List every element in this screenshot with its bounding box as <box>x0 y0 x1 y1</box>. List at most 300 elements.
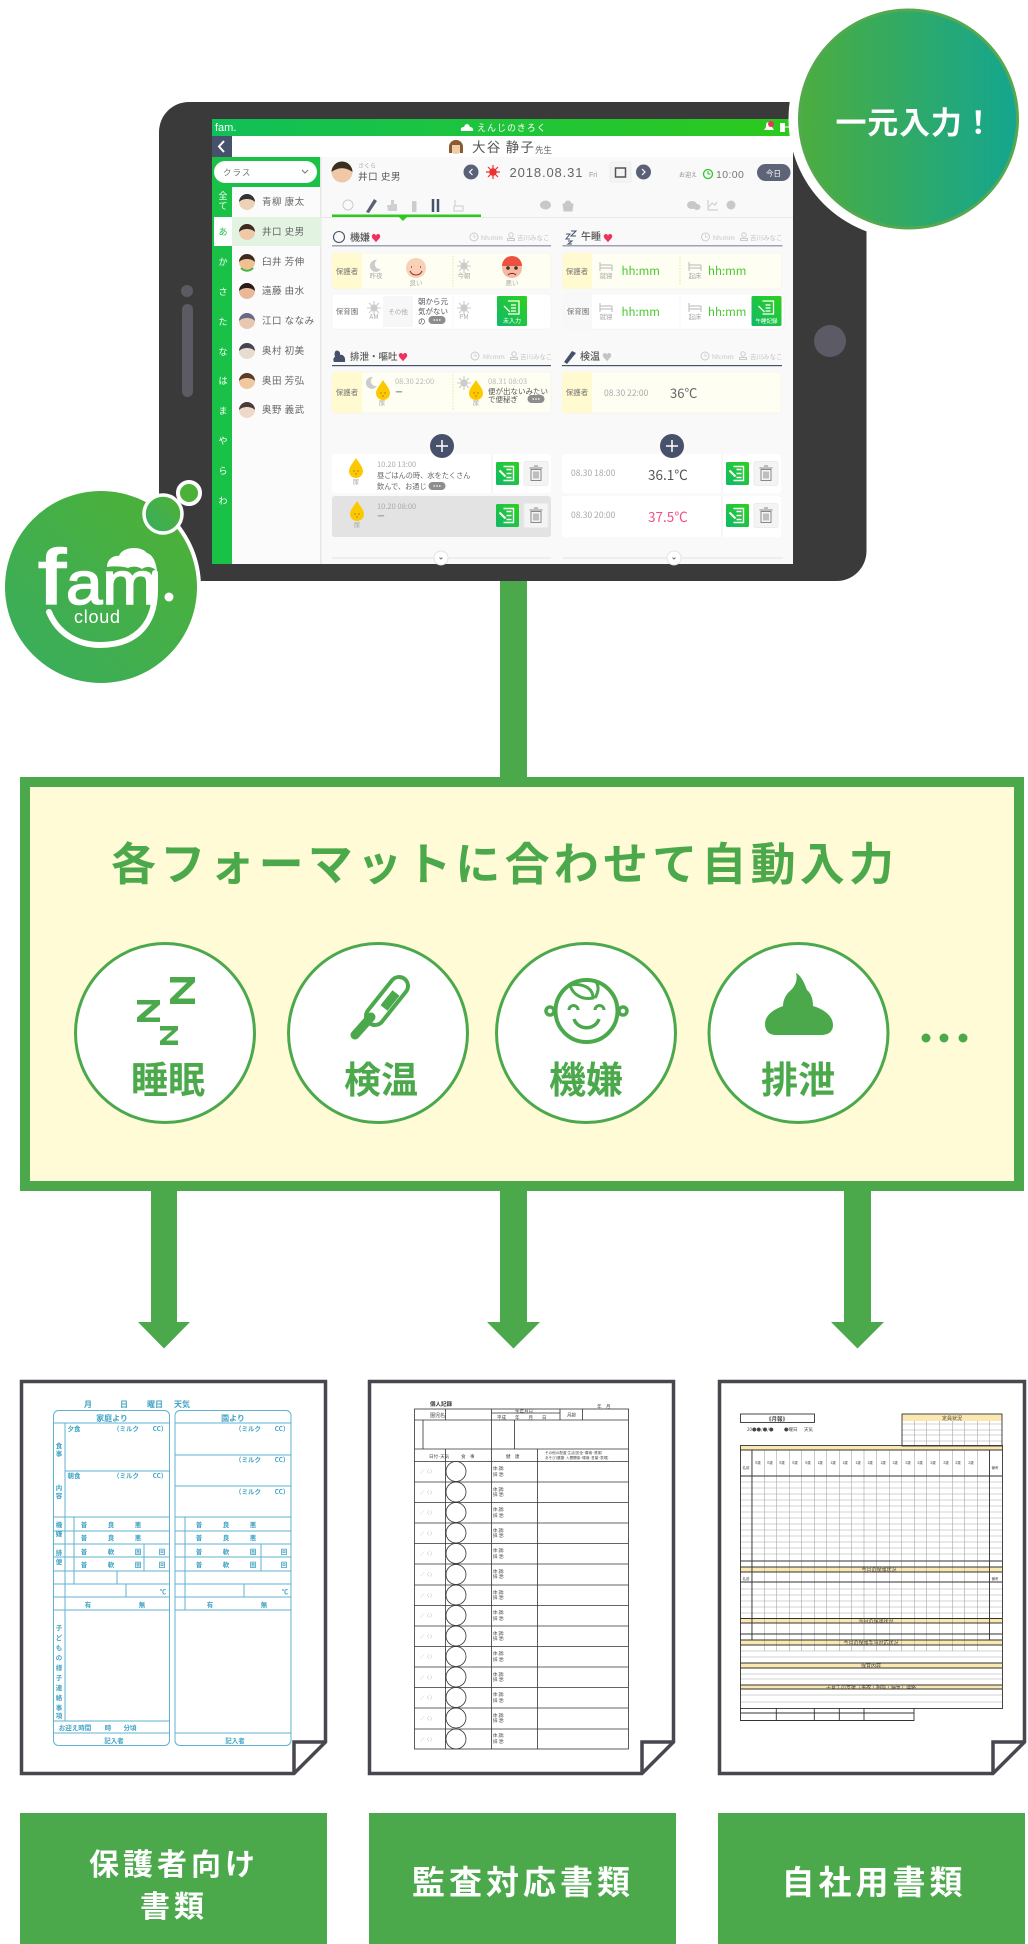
nap card: parent: 保護者 <box>566 266 589 277</box>
record text: 体 調: <box>493 1547 504 1554</box>
callout: unified input bubble <box>788 0 1028 239</box>
record text: 体 調: <box>493 1589 504 1596</box>
toilet card: parent: で便秘ぎ <box>488 394 518 405</box>
temperature card: parent <box>562 372 781 413</box>
child list: 遠藤 由水 <box>262 283 305 297</box>
section: temperature: ♥ <box>602 349 612 364</box>
form text: 普 <box>196 1559 203 1569</box>
form text: 時 <box>105 1722 112 1732</box>
kana index: は <box>218 374 228 387</box>
record text: 排 泄: <box>493 1512 504 1519</box>
arrow: to parent documents <box>138 1191 190 1348</box>
kana index: か <box>218 255 228 268</box>
mood card: nursery: PM <box>459 311 469 321</box>
teacher name bar: 先生 <box>535 144 553 156</box>
toilet row 1 <box>332 454 551 493</box>
toilet row 2: 10.20 08:00 <box>377 501 416 512</box>
logo cloud <box>107 548 157 571</box>
form text: 軟 <box>223 1546 230 1556</box>
callout: unified input bubble: 一元入力！ <box>836 98 994 143</box>
temperature list <box>562 454 781 537</box>
item: toilet <box>709 944 888 1122</box>
form text: ℃ <box>282 1586 289 1596</box>
section: mood: 吉川みなこ <box>517 232 550 242</box>
item: temperature: 検温 <box>344 1050 418 1104</box>
report text: 1歳 <box>817 1460 823 1466</box>
record text: 健 康 <box>506 1453 520 1460</box>
form text: 軟 <box>108 1559 115 1569</box>
mood card: parent <box>332 253 551 289</box>
section: temperature: 吉川みなこ <box>750 351 782 361</box>
toilet card: parent: 便が出ないみたい <box>488 386 548 397</box>
record text: ／（ ） <box>420 1737 435 1743</box>
report text: 2歳 <box>905 1460 911 1466</box>
app header bar: えんじのきろく <box>477 121 547 134</box>
form text: 分頃 <box>124 1722 137 1732</box>
section: mood: 機嫌 <box>350 229 370 244</box>
class selector: クラス <box>223 166 251 178</box>
mood card: parent: 今朝 <box>458 270 470 280</box>
report text: 1歳 <box>855 1460 861 1466</box>
nap card: nursery: hh:mm <box>708 304 746 320</box>
form text: 良 <box>108 1519 115 1529</box>
form text: 嫌 <box>56 1528 63 1538</box>
form text: 固 <box>250 1559 257 1569</box>
child list: 奥田 芳弘 <box>262 373 305 387</box>
category tabs <box>321 199 793 221</box>
child and date header: 2018.08.31 <box>510 165 584 180</box>
mood card: parent: 良い <box>410 277 422 287</box>
report yellow bands <box>740 1414 1002 1689</box>
form text: 月 <box>84 1399 92 1410</box>
logo smile <box>49 573 155 645</box>
form text: ど <box>56 1632 63 1642</box>
form text: 園より <box>221 1413 245 1424</box>
form text: 天気 <box>174 1399 190 1410</box>
report text: 1歳 <box>880 1460 886 1466</box>
app screen <box>212 119 793 565</box>
temperature row 2: 37.5℃ <box>648 506 688 526</box>
form text: CC） <box>275 1423 289 1433</box>
document: monthly report <box>720 1382 1024 1774</box>
kana index: わ <box>218 494 228 507</box>
record text: ／（ ） <box>420 1551 435 1557</box>
report text: 2歳 <box>930 1460 936 1466</box>
record text: 排 泄: <box>493 1615 504 1622</box>
section: toilet: 吉川みなこ <box>520 351 552 361</box>
report text: 1歳 <box>830 1460 836 1466</box>
form text: 子 <box>56 1622 63 1632</box>
kana index: や <box>218 434 228 447</box>
record text: ／（ ） <box>420 1695 435 1701</box>
section: nap: ♥ <box>603 230 613 245</box>
record text: 個人記録 <box>430 1400 453 1408</box>
child and date header: Fri <box>589 172 598 179</box>
form text: 回 <box>281 1546 288 1556</box>
record text: あそび(健康･人間関係･環境･言葉･表現) <box>545 1455 609 1461</box>
report text: 備考 <box>992 1576 999 1582</box>
report text: 0歳 <box>767 1460 773 1466</box>
section: toilet: hh:mm <box>483 351 505 361</box>
kana index: 全 <box>218 189 228 202</box>
panel heading: 各フォーマットに合わせて自動入力 <box>111 828 898 893</box>
record text: 体 調: <box>493 1712 504 1719</box>
tablet home button <box>814 325 846 357</box>
toilet row 1: 昼ごはんの時、水をたくさん <box>377 471 470 481</box>
report text: 今月の保護手当対応状況 <box>843 1640 899 1646</box>
section: temperature: hh:mm <box>712 351 734 361</box>
kana index: な <box>218 345 228 358</box>
section: mood <box>332 229 551 329</box>
mood card: parent: 悪い <box>506 277 518 287</box>
form text: （ミルク <box>235 1454 261 1464</box>
form text: 食 <box>56 1440 63 1450</box>
record text: 排 泄: <box>493 1491 504 1498</box>
kana index: ら <box>218 464 228 477</box>
record text: 日付･天気 <box>429 1453 450 1460</box>
record text: 排 泄: <box>493 1635 504 1642</box>
class selector <box>214 161 317 183</box>
report text: 0歳 <box>779 1460 785 1466</box>
form text: CC） <box>275 1486 289 1496</box>
tablet <box>159 102 866 581</box>
report text: 子育ての支援（事故・相談・病気）連絡 <box>826 1684 916 1691</box>
form text: 様 <box>56 1662 63 1672</box>
section: toilet <box>332 349 552 413</box>
record text: 排 泄: <box>493 1573 504 1580</box>
report text: ●曜日 <box>784 1427 798 1433</box>
temperature card: parent: 08.30 22:00 <box>604 387 649 399</box>
label: company documents <box>718 1813 1025 1944</box>
temperature row 2 <box>562 496 781 537</box>
record text: 排 泄: <box>493 1717 504 1724</box>
toilet row 1: 尿 <box>353 476 360 486</box>
record text: 体 調: <box>493 1630 504 1637</box>
child list: 奥野 義武 <box>262 402 305 416</box>
record text: 食 事 <box>461 1453 475 1460</box>
record text: 月齢 <box>567 1412 576 1418</box>
temperature row 1: 36.1℃ <box>648 464 688 484</box>
section: temperature <box>562 348 782 413</box>
record text: 体 調: <box>493 1568 504 1575</box>
form text: 絡 <box>56 1692 63 1702</box>
form text: 良 <box>223 1532 230 1542</box>
child list <box>239 194 315 418</box>
form text: （ミルク <box>235 1423 261 1433</box>
record text: 体 調: <box>493 1671 504 1678</box>
report text: 2歳 <box>968 1460 974 1466</box>
child and date header: さくら <box>358 161 376 170</box>
form text: 普 <box>196 1519 203 1529</box>
form text: 事 <box>56 1448 63 1458</box>
item: sleep: 睡眠 <box>131 1050 205 1104</box>
record text: 年 月 <box>597 1403 610 1410</box>
arrow: to company documents <box>831 1191 884 1348</box>
item: temperature <box>288 944 468 1122</box>
toilet row 1: 飲んで、お通じ <box>377 482 427 492</box>
record text: 体 調: <box>493 1732 504 1739</box>
record text: 排 泄: <box>493 1676 504 1683</box>
child list: 江口 ななみ <box>262 313 315 327</box>
toilet card: parent: 尿 <box>379 397 386 407</box>
report text: 定員状況 <box>942 1415 962 1422</box>
form text: 回 <box>159 1546 166 1556</box>
nap card: parent <box>562 253 782 289</box>
report text: 0歳 <box>755 1460 761 1466</box>
mood card: nursery: 気がない <box>418 306 448 317</box>
form text: 無 <box>139 1599 146 1609</box>
app header bar <box>212 119 792 136</box>
record text: 排 泄: <box>493 1697 504 1704</box>
form text: 良 <box>223 1519 230 1529</box>
form text: 普 <box>81 1532 88 1542</box>
form text: 回 <box>281 1559 288 1569</box>
form text: 無 <box>261 1599 268 1609</box>
record text: 排 泄: <box>493 1656 504 1663</box>
report text: 20●●/●/● <box>747 1427 774 1433</box>
record text: 体 調: <box>493 1465 504 1472</box>
form text: 連 <box>56 1682 63 1692</box>
form text <box>56 1399 289 1745</box>
form text: 普 <box>81 1559 88 1569</box>
form text: 記入者 <box>104 1735 124 1745</box>
report text: 名前 <box>742 1465 750 1471</box>
form text: （ミルク <box>113 1423 139 1433</box>
label: audit documents: 監査対応書類 <box>412 1856 634 1904</box>
label: parent documents <box>20 1813 327 1944</box>
form text: 悪 <box>250 1519 257 1529</box>
form text: （ミルク <box>235 1486 261 1496</box>
logo wordmark: f <box>38 533 66 621</box>
form text: 朝食 <box>68 1470 81 1480</box>
record text: ／（ ） <box>420 1510 435 1516</box>
section: nap: 吉川みなこ <box>750 232 782 242</box>
item: mood <box>496 944 676 1122</box>
toilet row 2 <box>332 496 551 537</box>
label: parent documents: 保護者向け <box>89 1840 259 1884</box>
form text: 日 <box>120 1399 128 1410</box>
record text: 平成 年 月 日 <box>497 1414 546 1421</box>
form text: 軟 <box>223 1559 230 1569</box>
temperature card: parent: 36℃ <box>670 383 697 402</box>
record text <box>420 1400 610 1745</box>
mood card: nursery: 保育園 <box>336 306 358 317</box>
kana index: た <box>218 315 228 328</box>
logo wordmark <box>38 533 157 621</box>
form text: 内 <box>56 1482 62 1492</box>
record text: ／（ ） <box>420 1716 435 1722</box>
record text: 体 調: <box>493 1650 504 1657</box>
child and date header: 今日 <box>766 168 781 179</box>
arrow: to audit documents <box>487 1191 540 1348</box>
temperature row 2: 08.30 20:00 <box>571 509 616 521</box>
record text: ／（ ） <box>420 1469 435 1475</box>
temperature card: parent: 保護者 <box>566 387 589 398</box>
record text: 排 泄: <box>493 1594 504 1601</box>
report grid <box>740 1421 1002 1702</box>
child list: 臼井 芳伸 <box>262 254 305 268</box>
arrow: tablet to panel <box>500 575 527 780</box>
toilet card: parent <box>332 372 551 413</box>
form text: 普 <box>81 1546 88 1556</box>
section: mood: ♥ <box>371 230 381 245</box>
label: audit documents <box>369 1813 676 1944</box>
form text: CC） <box>153 1470 167 1480</box>
section: toilet: ♥ <box>398 349 408 364</box>
record text: 排 泄: <box>493 1738 504 1745</box>
report text: 《月報》 <box>766 1415 788 1423</box>
kana index: ま <box>218 404 228 417</box>
record text: 体 調: <box>493 1691 504 1698</box>
form text: 固 <box>135 1546 142 1556</box>
form text: 夕食 <box>68 1423 81 1433</box>
temperature row 1 <box>562 454 781 493</box>
toilet list <box>332 454 551 537</box>
record text: 排 泄: <box>493 1532 504 1539</box>
child and date header <box>332 161 790 183</box>
panel: auto input <box>25 782 1019 1186</box>
report text: 保育内容 <box>861 1662 881 1670</box>
form text: 回 <box>159 1559 166 1569</box>
add button: toilet <box>430 434 454 458</box>
kana index: あ <box>218 225 228 238</box>
app header bar: fam. <box>215 122 236 134</box>
form text: 悪 <box>250 1532 257 1542</box>
child list: 青柳 康太 <box>262 194 305 208</box>
record table <box>414 1409 628 1749</box>
report text: 備考 <box>992 1465 999 1471</box>
mood card: nursery: の <box>418 316 426 327</box>
nap card: nursery: 就寝 <box>600 311 613 321</box>
form text: 悪 <box>135 1519 142 1529</box>
record text: 体 調: <box>493 1486 504 1493</box>
report text: 2歳 <box>917 1460 923 1466</box>
mood card: nursery <box>332 294 551 329</box>
mood card: nursery: 朝から元 <box>418 296 448 307</box>
mood card: nursery: 未入力 <box>503 316 521 325</box>
form text: 有 <box>207 1599 214 1609</box>
form tables <box>54 1410 291 1746</box>
tablet body <box>159 102 866 581</box>
form text: （ミルク <box>113 1470 139 1480</box>
record text: その他の配慮 生活(安全･環境･清潔) <box>545 1450 602 1456</box>
section: mood: hh:mm <box>481 232 503 242</box>
kana index <box>218 189 228 507</box>
record text: ／（ ） <box>420 1593 435 1599</box>
form text: 排 <box>56 1547 63 1557</box>
temperature row 1: 08.30 18:00 <box>571 467 616 479</box>
form text: 子 <box>56 1672 63 1682</box>
form text: 普 <box>81 1519 88 1529</box>
report text: 天気 <box>804 1426 813 1433</box>
record text: 排 泄: <box>493 1553 504 1560</box>
logo: fam cloud: cloud <box>74 607 120 627</box>
report text: 1歳 <box>892 1460 898 1466</box>
mood card: nursery: AM <box>369 311 379 321</box>
form text: お迎え時間 <box>59 1722 92 1732</box>
form text: 曜日 <box>147 1399 163 1410</box>
report text: 1歳 <box>867 1460 873 1466</box>
nap card: parent: hh:mm <box>708 263 746 279</box>
report text: 0歳 <box>805 1460 811 1466</box>
form text: 項 <box>56 1710 63 1720</box>
form text: 固 <box>135 1559 142 1569</box>
mood card: nursery: その他 <box>388 306 408 316</box>
record text: 体 調: <box>493 1506 504 1513</box>
record text: 園児名 <box>430 1412 445 1419</box>
label: company documents: 自社用書類 <box>782 1856 966 1904</box>
toilet row 2: 尿 <box>354 519 361 529</box>
nap card: parent: hh:mm <box>622 263 660 279</box>
record text: ／（ ） <box>420 1572 435 1578</box>
form text: 固 <box>250 1546 257 1556</box>
record text: 排 泄: <box>493 1471 504 1478</box>
record text: ／（ ） <box>420 1531 435 1537</box>
section: temperature: 検温 <box>580 348 600 363</box>
child and date header: 10:00 <box>716 169 744 181</box>
toilet card: parent: 08.31 08:03 <box>488 376 527 387</box>
form text: ℃ <box>160 1586 167 1596</box>
mood card: parent: 保護者 <box>336 266 359 277</box>
kana index: て <box>218 199 228 212</box>
kana index: さ <box>218 285 228 298</box>
toilet card: parent: ー <box>395 387 403 398</box>
scroll chevrons <box>332 551 783 565</box>
nap card: nursery: 午睡記録 <box>755 317 778 325</box>
sidebar <box>212 157 322 564</box>
record text: 体 調: <box>493 1527 504 1534</box>
child list: 井口 史男 <box>262 224 305 238</box>
nap card: parent: 起床 <box>688 270 702 280</box>
child and date header: 井口 史男 <box>358 169 401 183</box>
form text: 事 <box>56 1702 63 1712</box>
record text: ／（ ） <box>420 1634 435 1640</box>
form text: 悪 <box>135 1532 142 1542</box>
mood card: parent: 昨夜 <box>370 270 383 280</box>
section: nap: 午睡 <box>581 228 601 243</box>
toilet card: parent: 尿 <box>473 397 480 407</box>
toilet card: parent: 08.30 22:00 <box>395 376 434 387</box>
report text: 0歳 <box>792 1460 798 1466</box>
child and date header: お迎え <box>679 170 697 179</box>
report text: 2歳 <box>943 1460 949 1466</box>
teacher name bar: 大谷 静子 <box>472 136 535 156</box>
report outlines <box>740 1414 1002 1720</box>
record text: ／（ ） <box>420 1490 435 1496</box>
form text: も <box>56 1642 62 1652</box>
item: sleep <box>76 944 254 1122</box>
toilet row 1: 10.20 13:00 <box>377 459 416 470</box>
document: audit record <box>370 1382 674 1774</box>
section: toilet: 排泄・嘔吐 <box>350 349 398 363</box>
form text: 便 <box>56 1556 63 1566</box>
child list: 奥村 初美 <box>262 343 305 357</box>
form text: 家庭より <box>96 1413 128 1424</box>
item: mood: 機嫌 <box>549 1050 623 1104</box>
report text: 今月の保護状況 <box>861 1566 897 1574</box>
toilet card: parent: 保護者 <box>336 387 359 398</box>
form text: 普 <box>196 1532 203 1542</box>
report text: 2歳 <box>955 1460 961 1466</box>
nap card: nursery: hh:mm <box>622 304 660 320</box>
section: nap <box>562 228 784 329</box>
form text: 軟 <box>108 1546 115 1556</box>
form text: CC） <box>275 1454 289 1464</box>
form text: 容 <box>56 1490 63 1500</box>
nap card: nursery <box>564 294 784 329</box>
record text: 体 調: <box>493 1609 504 1616</box>
logo: fam cloud <box>1 482 201 687</box>
